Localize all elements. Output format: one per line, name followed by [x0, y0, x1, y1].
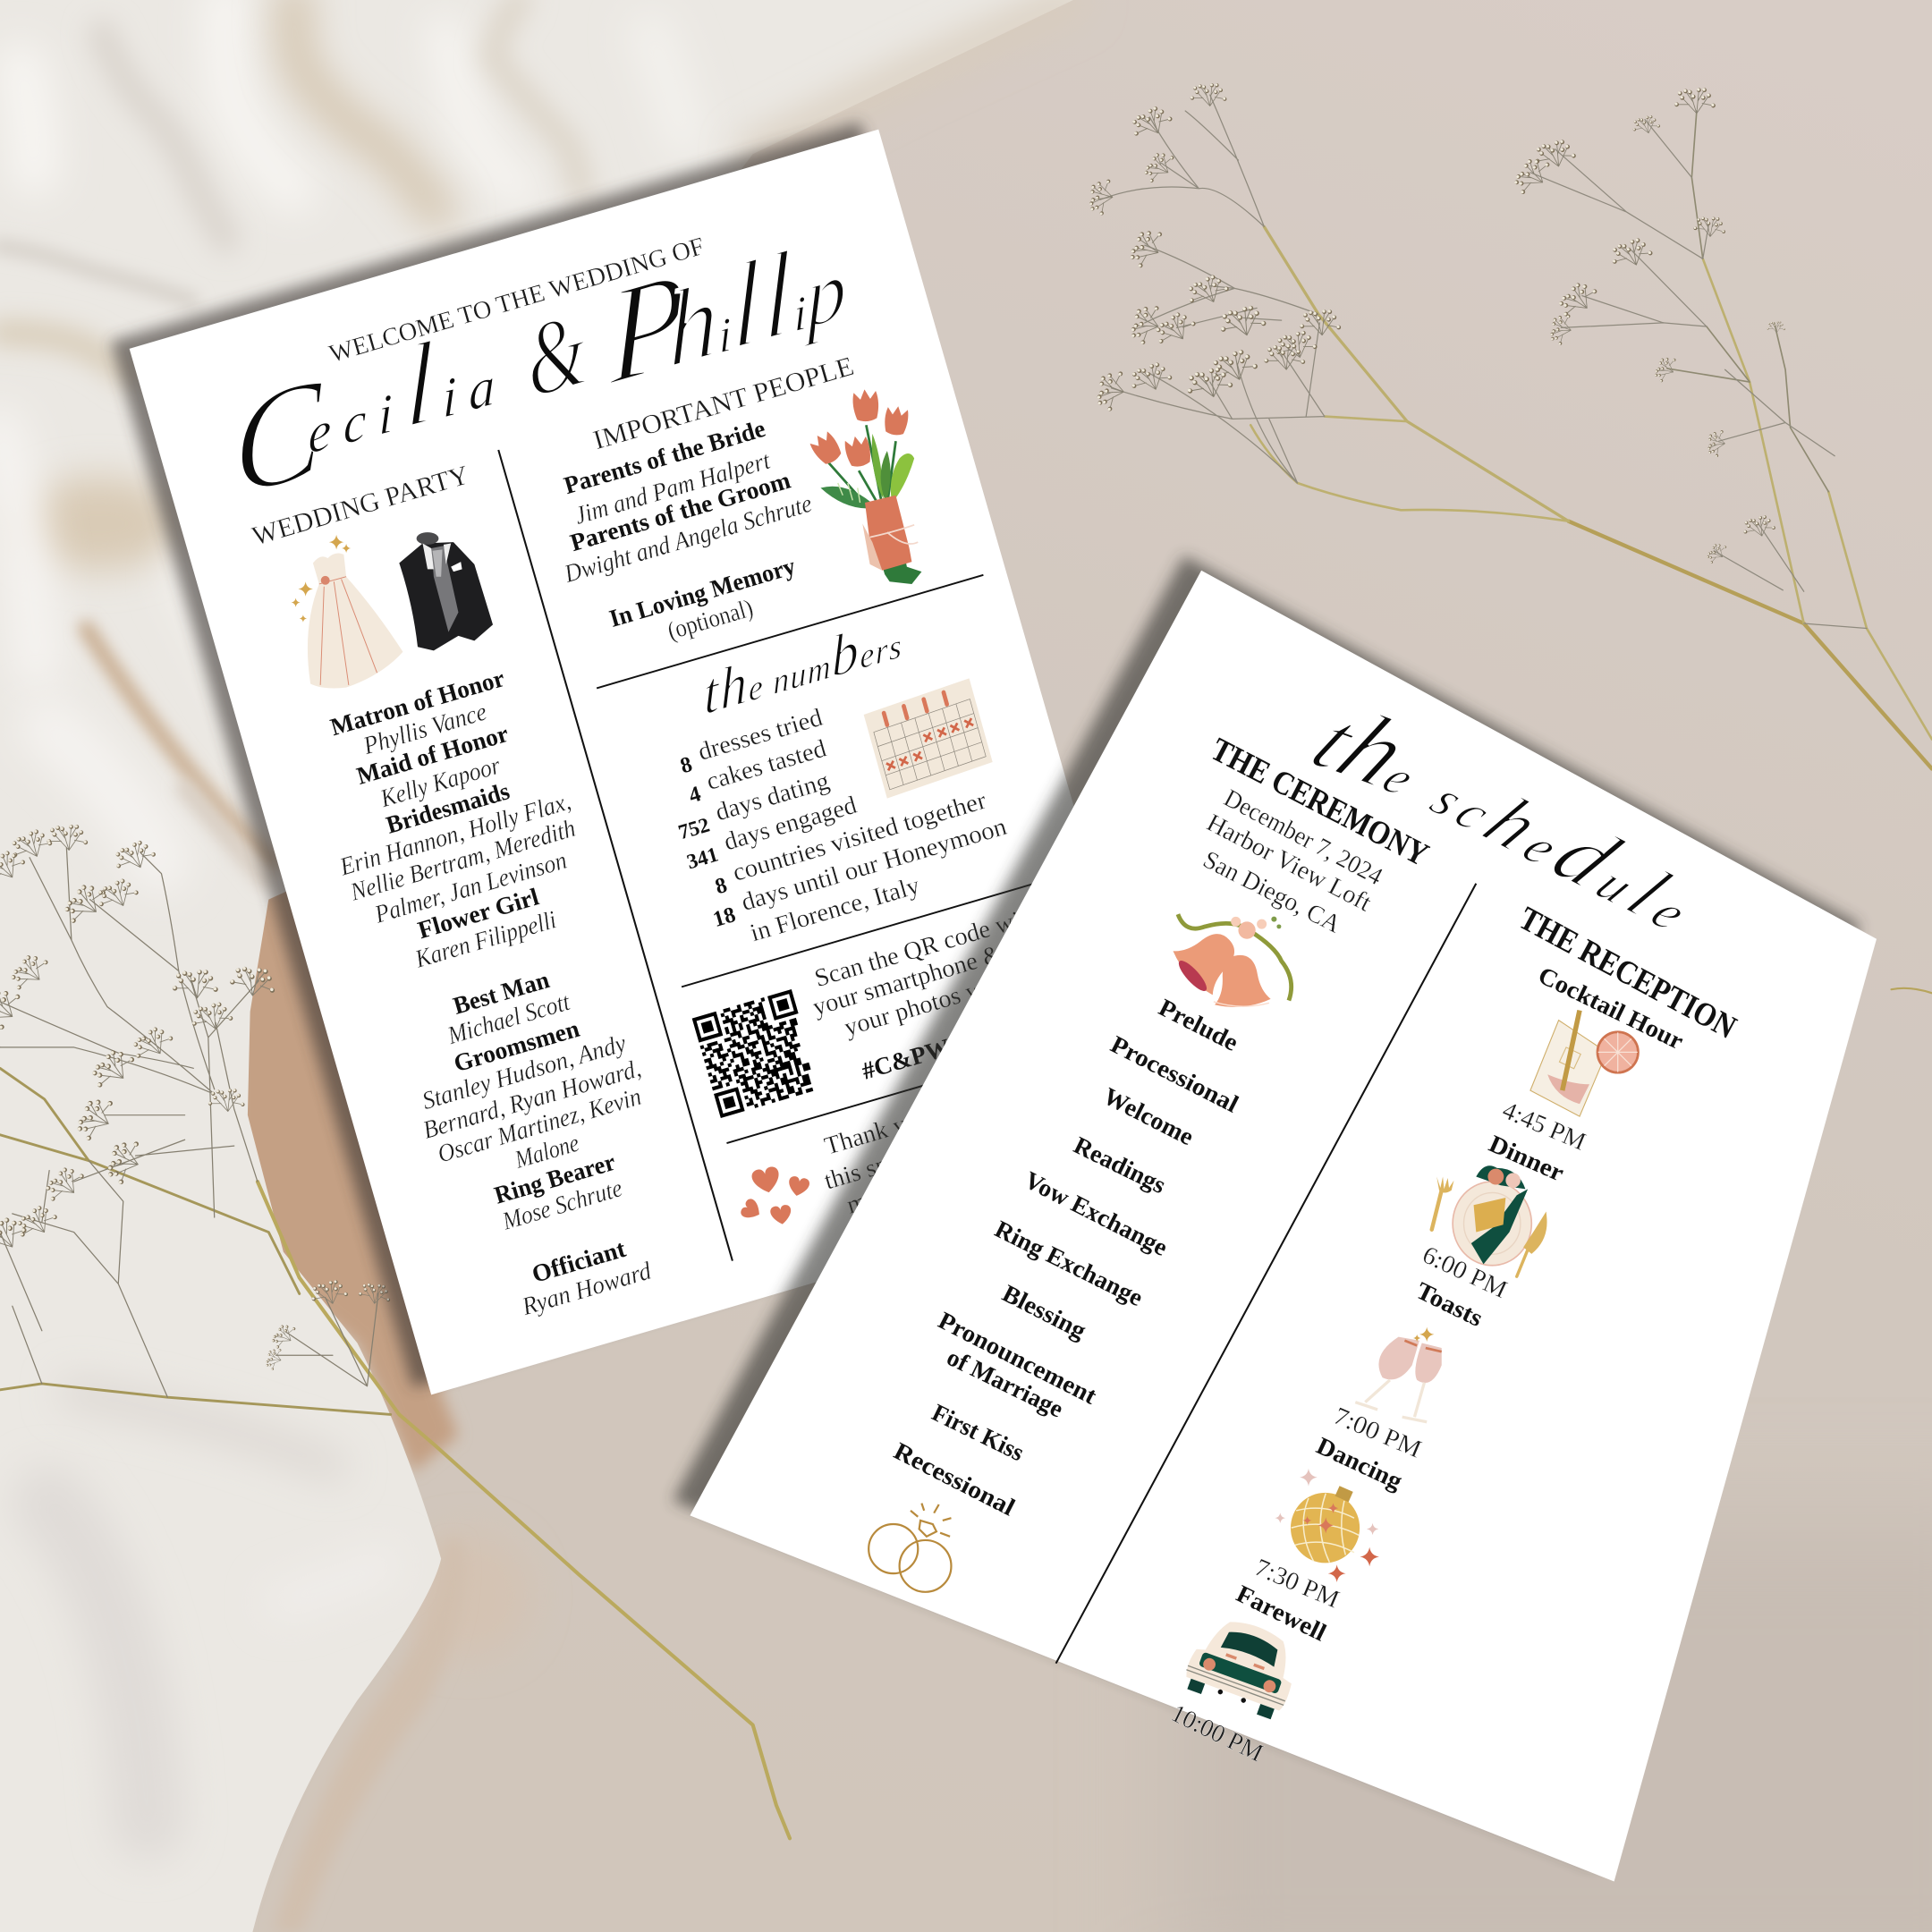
- text: parents: [537, 407, 815, 589]
- text: bride's attendants: Bridesmaids: [383, 776, 513, 839]
- card: the schedule: [673, 555, 1877, 1882]
- icon: dinner plate: [1432, 1165, 1546, 1276]
- text: bride's attendants: Flower Girl: [415, 882, 542, 944]
- text: reception schedule: Cocktail Hour: [1534, 961, 1688, 1055]
- title: the schedule: [1293, 684, 1728, 950]
- text: ceremony details: San Diego, CA: [1199, 846, 1345, 939]
- text: groom's attendants: Groomsmen: [451, 1014, 582, 1077]
- card contents in rotated card space: [199, 182, 1147, 1336]
- title: couple names: Phillip: [605, 194, 848, 415]
- text: groom's attendants: Bernard, Ryan Howard,: [420, 1055, 644, 1145]
- section rule: [726, 1030, 1114, 1143]
- card sheet: [690, 571, 1877, 1882]
- text: ceremony order: [890, 993, 1243, 1521]
- text: ceremony order: Ring Exchange: [991, 1215, 1148, 1311]
- text: ceremony details: [1199, 784, 1387, 939]
- text: ceremony order: of Marriage: [943, 1343, 1068, 1423]
- text: reception schedule: [1166, 961, 1688, 1767]
- card shadow: [111, 122, 1162, 1387]
- text: bride's attendants: Erin Hannon, Holly Flax,: [336, 788, 574, 882]
- text: parents: Dwight and Angela Schrute: [561, 490, 815, 589]
- text: thank you note: this special day with us. It: [821, 1095, 1082, 1196]
- text: parents: Parents of the Bride: [561, 414, 768, 499]
- sprig: dried baby's breath, left: [0, 826, 790, 1838]
- card: wedding programme front: [111, 122, 1181, 1394]
- text: reception schedule: Toasts: [1412, 1276, 1487, 1332]
- text: groom's attendants: Malone: [512, 1130, 582, 1174]
- text: wedding statistics: in Florence, Italy: [747, 872, 923, 947]
- text: bride's attendants: [298, 656, 605, 987]
- title: couple names: [232, 194, 848, 528]
- title: couple names: &: [518, 289, 594, 421]
- text: officiant: Officiant: [529, 1234, 630, 1288]
- text: wedding statistics: 8: [678, 752, 695, 778]
- text: ceremony order: Processional: [1106, 1030, 1243, 1118]
- icon: just married car: [1181, 1609, 1307, 1722]
- QR code: [692, 991, 819, 1116]
- text: ceremony order: Pronouncement: [934, 1306, 1102, 1410]
- section rule: [682, 873, 1070, 987]
- text: parents: Parents of the Groom: [567, 466, 793, 556]
- text: wedding statistics: days dating: [712, 767, 833, 826]
- icon: disco ball: [1275, 1469, 1379, 1582]
- text: wedding statistics: 18: [710, 902, 738, 932]
- text: bride's attendants: Kelly Kapoor: [377, 751, 504, 813]
- heading: important people: IMPORTANT PEOPLE: [589, 351, 857, 455]
- text: thank you note: [812, 1060, 1099, 1224]
- text: QR instructions: [802, 897, 1083, 1093]
- heading: wedding party: WEDDING PARTY: [249, 459, 472, 552]
- icon: tulip bouquet: [808, 388, 921, 584]
- section rule: [597, 575, 983, 688]
- text: ceremony order: Welcome: [1099, 1081, 1199, 1150]
- icon: wedding rings: [869, 1504, 951, 1592]
- text: QR instructions: your smartphone & share: [809, 923, 1063, 1021]
- text: in loving memory: In Loving Memory: [606, 552, 799, 632]
- icon: wedding dress: [292, 535, 402, 688]
- heading: welcome: WELCOME TO THE WEDDING OF: [326, 233, 708, 369]
- text: wedding statistics: 752: [676, 813, 712, 844]
- text: parents: Jim and Pam Halpert: [572, 446, 775, 530]
- card shadow: [673, 555, 1860, 1867]
- title: couple names: eci: [308, 378, 405, 466]
- text: reception schedule: 7:30 PM: [1250, 1554, 1343, 1614]
- text: groom's attendants: [389, 947, 674, 1250]
- text: wedding statistics: days until our Honeymoon: [738, 813, 1010, 917]
- text: wedding statistics: cakes tasted: [703, 734, 829, 796]
- text: wedding statistics: 8: [713, 873, 730, 899]
- text: officiant: Ryan Howard: [518, 1257, 655, 1321]
- icon: wedding bells: [1169, 914, 1292, 1010]
- text: thank you note: means the world to us: [843, 1131, 1064, 1220]
- text: ceremony order: Vow Exchange: [1021, 1165, 1173, 1261]
- text: ceremony order: Blessing: [998, 1279, 1091, 1344]
- text: wedding statistics: 4: [686, 782, 704, 808]
- text: groom's attendants: Michael Scott: [444, 988, 574, 1050]
- text: bride's attendants: Karen Filippelli: [411, 906, 560, 974]
- text: ceremony order: Prelude: [1155, 993, 1243, 1056]
- text: reception schedule: 10:00 PM: [1166, 1699, 1267, 1767]
- text: groom's attendants: Oscar Martinez, Kevin: [435, 1083, 645, 1169]
- title: the schedule: the: [1293, 684, 1453, 815]
- icon: calendar: [864, 678, 993, 799]
- heading: the ceremony: THE CEREMONY: [1205, 731, 1434, 874]
- text: reception schedule: Farewell: [1233, 1580, 1331, 1647]
- text: ceremony order: Recessional: [890, 1436, 1020, 1521]
- text: officiant: [510, 1229, 655, 1321]
- text: groom's attendants: Mose Schrute: [499, 1174, 625, 1236]
- text: bride's attendants: Phyllis Vance: [360, 698, 490, 760]
- sprig: dried baby's breath, right: [1089, 85, 1932, 993]
- text: wedding statistics: [656, 663, 1019, 959]
- icon: tuxedo: [399, 532, 493, 650]
- text: bride's attendants: Palmer, Jan Levinson: [371, 847, 570, 929]
- text: reception schedule: Dinner: [1485, 1129, 1568, 1187]
- text: wedding statistics: days engaged: [721, 792, 860, 856]
- title: couple names: lia: [403, 313, 507, 453]
- icon: hearts: [739, 1165, 810, 1225]
- column divider: [498, 450, 733, 1261]
- title: the schedule: schedule: [1414, 747, 1728, 950]
- text: groom's attendants: Ring Bearer: [491, 1148, 618, 1209]
- text: wedding statistics: countries visited together: [730, 786, 990, 887]
- text: reception schedule: 4:45 PM: [1498, 1097, 1589, 1157]
- text: ceremony details: December 7, 2024: [1219, 784, 1387, 891]
- icon: cocktail: [1530, 1011, 1638, 1116]
- text: ceremony order: First Kiss: [928, 1398, 1029, 1466]
- text: bride's attendants: Matron of Honor: [327, 664, 507, 741]
- text: ceremony order: Readings: [1070, 1131, 1171, 1199]
- card sheet: [130, 130, 1181, 1394]
- column divider: [1056, 884, 1476, 1664]
- heading: the numbers: the numbers: [702, 605, 903, 727]
- text: in loving memory: (optional): [665, 595, 756, 646]
- text: thank you note: Thank you for celebrating: [822, 1060, 1081, 1161]
- text: bride's attendants: Maid of Honor: [353, 719, 512, 790]
- icon: champagne flutes: [1355, 1327, 1442, 1422]
- text: wedding statistics: dresses tried: [695, 704, 826, 767]
- text: QR instructions: your photos with us!: [841, 957, 1048, 1042]
- text: bride's attendants: Nellie Bertram, Meredith: [347, 815, 579, 907]
- text: groom's attendants: Stanley Hudson, Andy: [419, 1030, 630, 1115]
- text: reception schedule: 6:00 PM: [1418, 1241, 1512, 1304]
- text: wedding statistics: 341: [684, 843, 721, 874]
- text: ceremony details: Harbor View Loft: [1202, 809, 1376, 917]
- title: couple names: C: [232, 345, 325, 528]
- text: reception schedule: Dancing: [1312, 1431, 1407, 1495]
- text: QR instructions: #C&PWedding: [859, 1013, 1021, 1085]
- text: groom's attendants: Best Man: [450, 965, 552, 1020]
- heading: the reception: THE RECEPTION: [1513, 900, 1742, 1046]
- text: QR instructions: Scan the QR code with: [811, 901, 1043, 993]
- text: reception schedule: 7:00 PM: [1329, 1402, 1426, 1464]
